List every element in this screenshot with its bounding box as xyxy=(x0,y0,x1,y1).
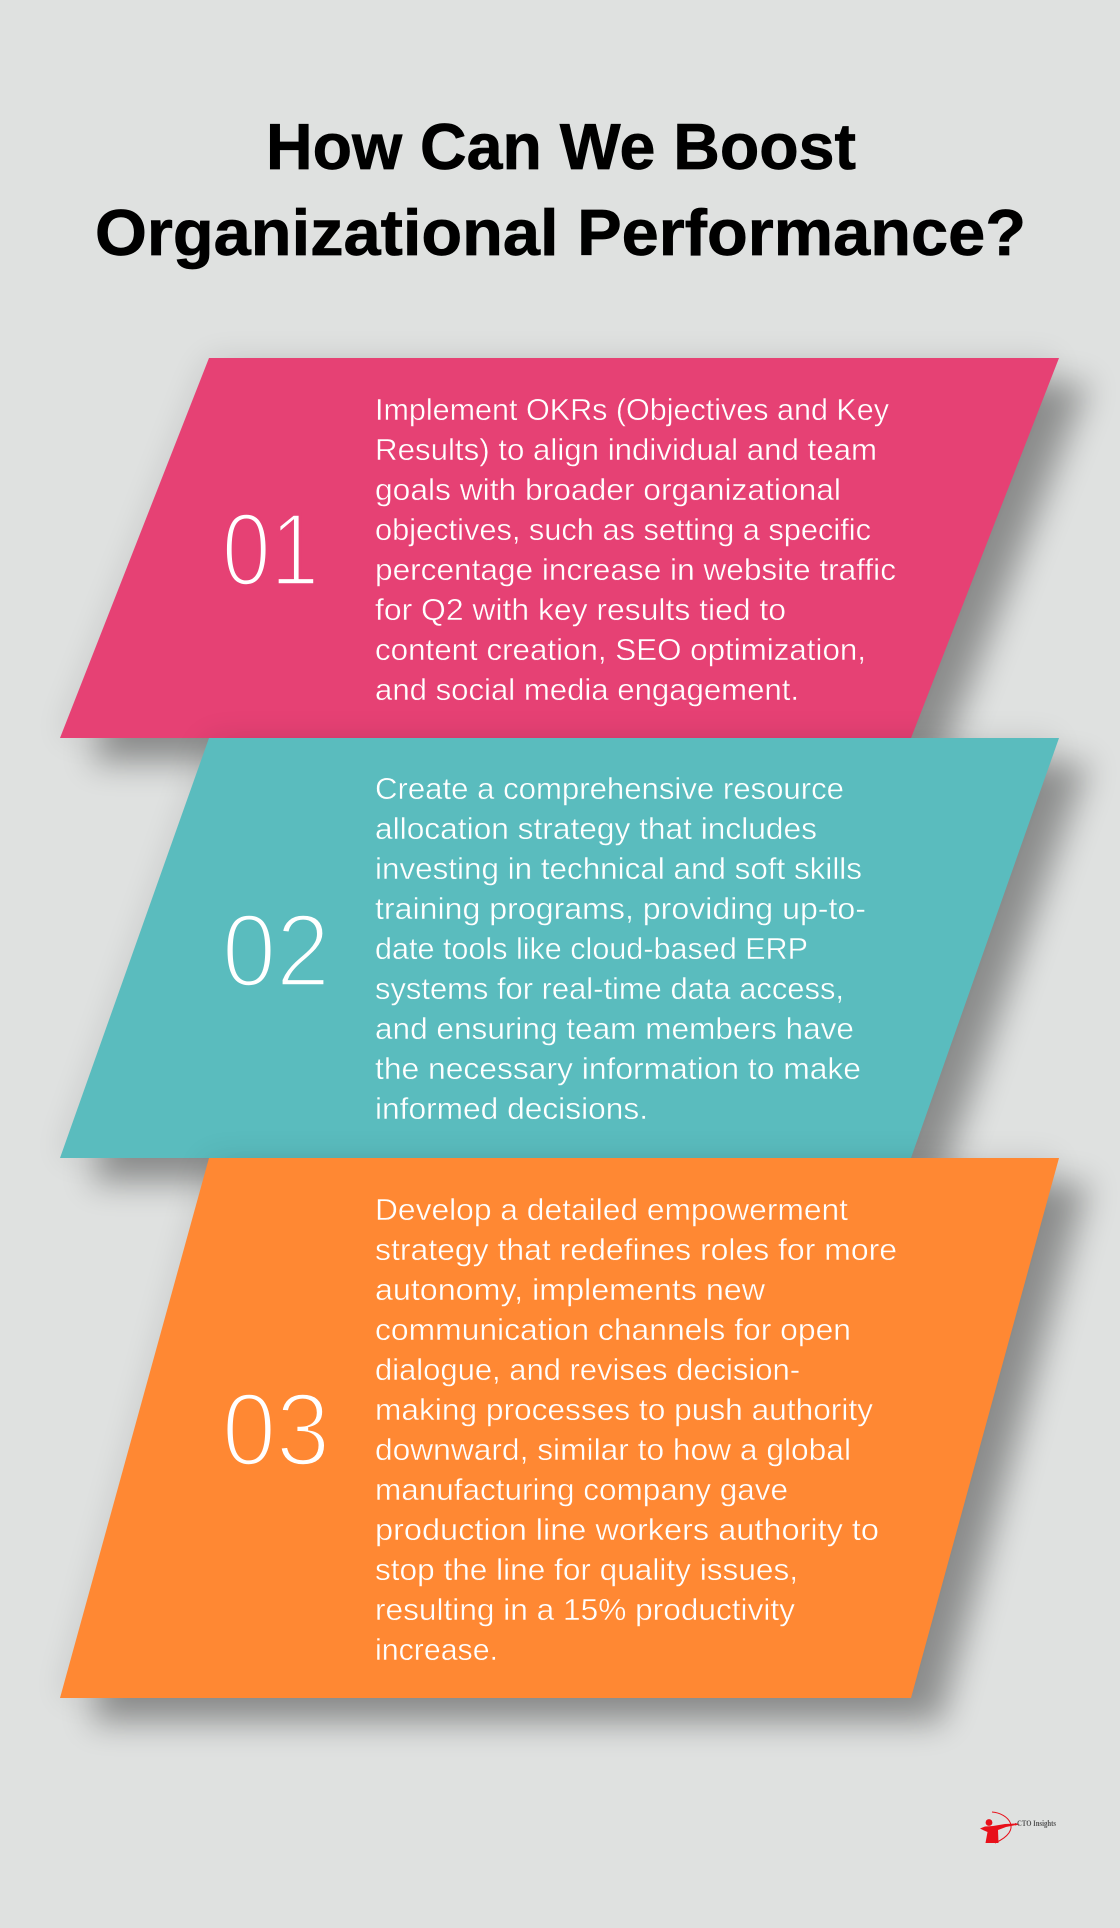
panel: step 03 xyxy=(60,1158,1059,1698)
text block: step 02 description: allocation strategy that includes xyxy=(375,812,817,846)
text block: step 02 description: Create a comprehensive resource xyxy=(375,772,844,806)
text block: step 02 description: training programs, providing up-to- xyxy=(375,892,866,926)
logo: CTO Insights archer xyxy=(980,1812,1056,1843)
text block: step 01 description: Results) to align individual and team xyxy=(375,433,877,467)
text block: step 03 description: making processes to push authority xyxy=(375,1393,874,1427)
number 03: 03 xyxy=(222,1372,330,1487)
number 01: 01 xyxy=(222,492,319,607)
title xyxy=(95,110,1026,269)
text block: step 03 description: increase. xyxy=(375,1633,498,1667)
text block: step 02 description: systems for real-time data access, xyxy=(375,972,844,1006)
panel shape: teal parallelogram xyxy=(60,738,1059,1158)
panel: step 02 xyxy=(60,738,1059,1158)
text block: step 03 description: Develop a detailed empowerment xyxy=(375,1193,849,1227)
logo text: CTO Insights xyxy=(1017,1819,1056,1828)
text block: step 03 description: production line workers authority to xyxy=(375,1513,879,1547)
text block: step 02 description: informed decisions. xyxy=(375,1092,648,1126)
text block: step 01 description: Implement OKRs (Objectives and Key xyxy=(375,393,890,427)
text block: step 01 description: goals with broader organizational xyxy=(375,473,841,507)
text block: step 01 description: and social media engagement. xyxy=(375,673,799,707)
title: Organizational Performance? xyxy=(95,196,1026,269)
text block: step 01 description: objectives, such as setting a specific xyxy=(375,513,871,547)
panel shape: orange parallelogram xyxy=(60,1158,1059,1698)
text block: step 01 description: percentage increase in website traffic xyxy=(375,553,896,587)
number 02: 02 xyxy=(222,893,330,1008)
text block: step 03 description: autonomy, implements new xyxy=(375,1273,766,1307)
text block: step 03 description: dialogue, and revises decision- xyxy=(375,1353,800,1387)
text block: step 03 description: communication channels for open xyxy=(375,1313,851,1347)
panel shape: pink parallelogram xyxy=(60,358,1059,738)
text block: step 01 description: for Q2 with key results tied to xyxy=(375,593,786,627)
text block: step 01 description xyxy=(375,393,896,707)
text block: step 02 description: investing in technical and soft skills xyxy=(375,852,862,886)
text block: step 02 description: and ensuring team members have xyxy=(375,1012,854,1046)
text block: step 02 description: the necessary information to make xyxy=(375,1052,861,1086)
text block: step 02 description: date tools like cloud-based ERP xyxy=(375,932,808,966)
title: How Can We Boost xyxy=(266,110,856,183)
text block: step 03 description: manufacturing company gave xyxy=(375,1473,788,1507)
text block: step 03 description: stop the line for quality issues, xyxy=(375,1553,798,1587)
text block: step 03 description xyxy=(375,1193,897,1667)
panel: step 01 xyxy=(60,358,1059,738)
text block: step 01 description: content creation, SEO optimization, xyxy=(375,633,866,667)
text block: step 03 description: downward, similar to how a global xyxy=(375,1433,851,1467)
icon: red archer with bow xyxy=(980,1812,1020,1843)
text block: step 03 description: strategy that redefines roles for more xyxy=(375,1233,897,1267)
text block: step 02 description xyxy=(375,772,866,1126)
text block: step 03 description: resulting in a 15% productivity xyxy=(375,1593,796,1627)
